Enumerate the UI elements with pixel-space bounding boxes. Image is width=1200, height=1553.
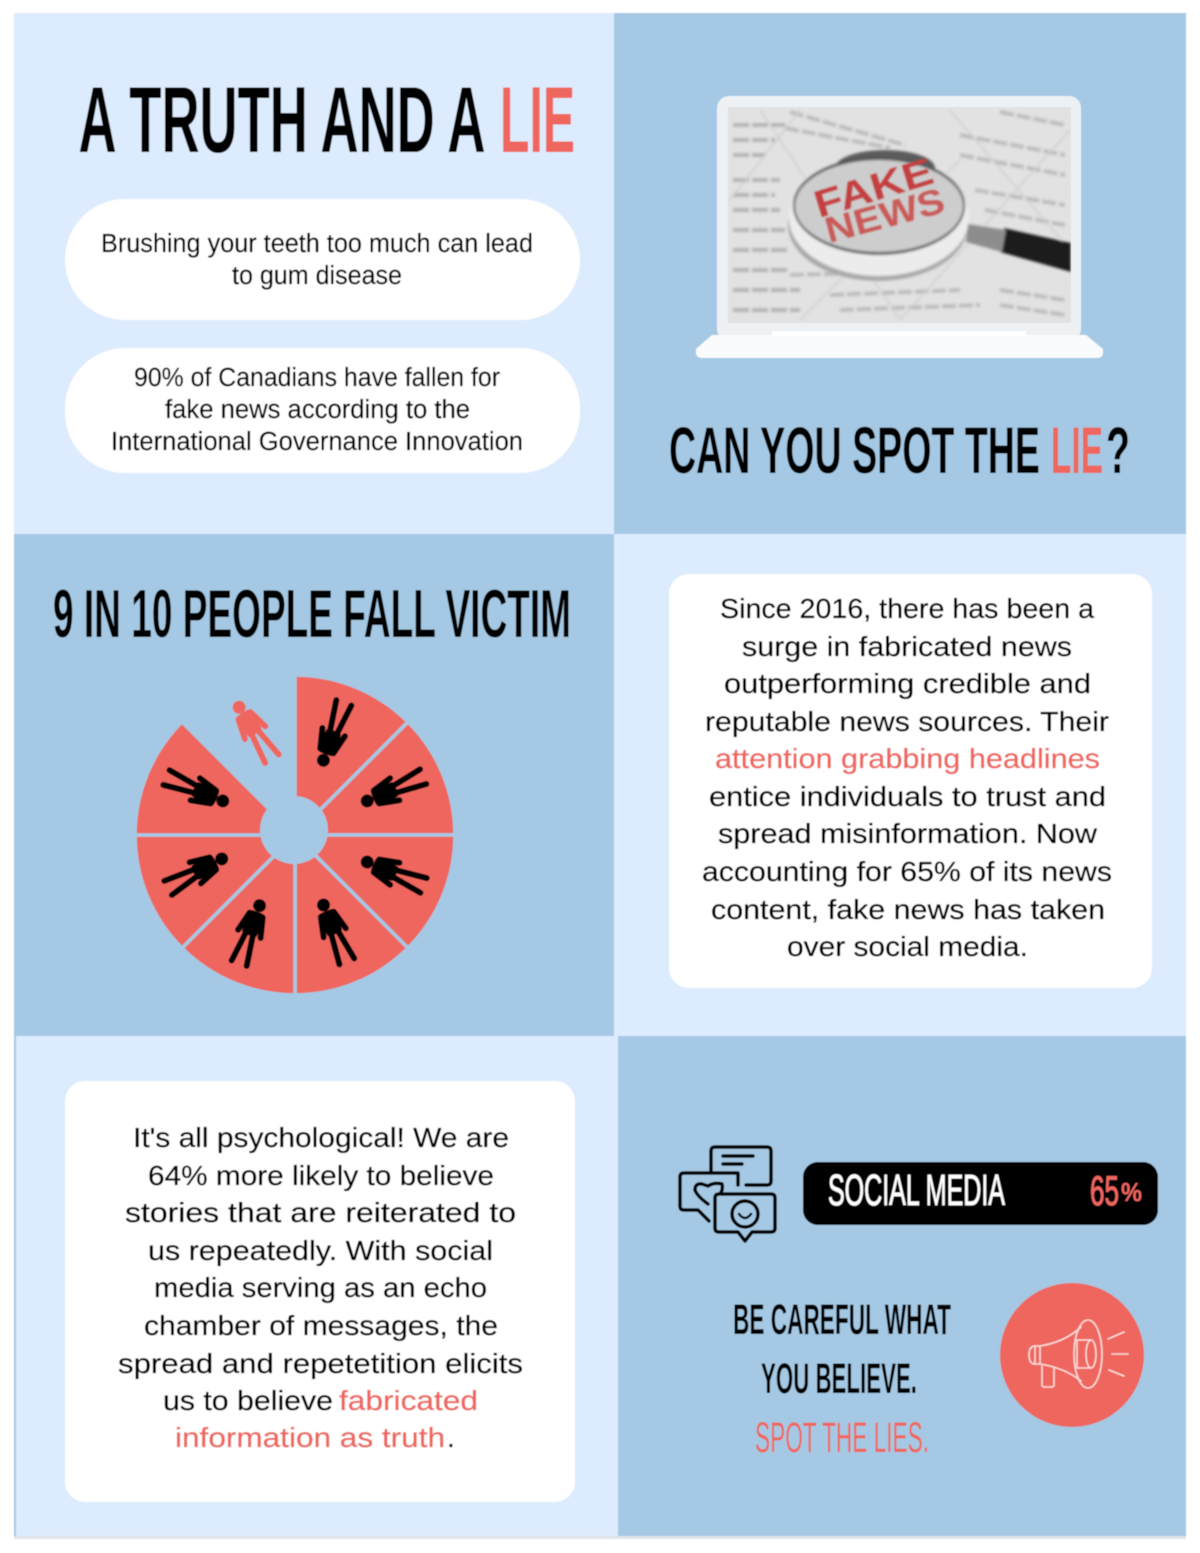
text card: fabricated news: over social media. <box>787 931 1028 962</box>
statement pill: 90% of Canadians: International Governance Innovation <box>111 428 523 456</box>
wheel chart: 9 of 10 <box>135 675 455 995</box>
text card: fabricated news: Since 2016, there has been a <box>720 593 1094 624</box>
laptop with fake news image: NEWS <box>820 180 949 251</box>
text card: fabricated news: reputable news sources. Their <box>705 706 1109 737</box>
panel: since 2016 <box>614 534 1186 1036</box>
panel: social media <box>618 1036 1186 1536</box>
icon: coral person <box>226 696 282 765</box>
text card: fabricated news: attention grabbing headlines <box>715 743 1100 774</box>
text card: psychology: us to believe <box>163 1385 333 1416</box>
laptop with fake news image: FAKE <box>809 151 938 227</box>
call to action text: YOU BELIEVE. <box>761 1355 917 1403</box>
text card: fabricated news: surge in fabricated news <box>742 631 1072 662</box>
text card: fabricated news: accounting for 65% of its news <box>702 856 1112 887</box>
call to action text: SPOT THE LIES. <box>755 1414 929 1462</box>
text card: psychology: . <box>447 1422 455 1453</box>
text card: psychology: chamber of messages, the <box>144 1310 498 1341</box>
title: LIE <box>500 67 575 172</box>
panel: a truth and a lie <box>14 13 614 534</box>
statement pill: 90% of Canadians: fake news according to the <box>165 396 470 424</box>
heading: 9 in 10 people fall victim: 9 IN 10 PEOPLE FALL VICTIM <box>53 576 571 652</box>
heading: can you spot the lie: ? <box>1106 413 1130 487</box>
panel: psychological <box>14 1036 618 1536</box>
text card: fabricated news: entice individuals to trust and <box>709 781 1106 812</box>
text card: psychology <box>65 1081 575 1502</box>
bottom shadow strip <box>14 1536 1186 1539</box>
text card: psychology: us repeatedly. With social <box>148 1235 493 1266</box>
text card: fabricated news <box>669 574 1152 988</box>
heading: can you spot the lie: LIE <box>1051 413 1103 487</box>
statement pill: brushing teeth <box>65 199 580 320</box>
statement pill: 90% of Canadians: 90% of Canadians have fallen for <box>134 364 500 392</box>
bar: social media 65%: 65 <box>1090 1167 1119 1214</box>
panel: can you spot the lie <box>614 13 1186 534</box>
icon: megaphone <box>1000 1283 1144 1427</box>
panel: 9 in 10 <box>14 534 614 1036</box>
bar: social media 65% <box>803 1162 1158 1225</box>
text card: psychology: spread and repetetition elicits <box>118 1348 523 1379</box>
laptop with fake news image <box>696 96 1103 358</box>
title <box>78 67 575 172</box>
statement pill: 90% of Canadians <box>65 348 580 473</box>
call to action text <box>733 1296 951 1462</box>
bar: social media 65%: SOCIAL MEDIA <box>828 1166 1005 1215</box>
text card: fabricated news: outperforming credible and <box>724 668 1091 699</box>
icon: chat bubbles <box>680 1147 775 1241</box>
text card: psychology: fabricated <box>339 1385 478 1416</box>
bar: social media 65%: % <box>1121 1177 1142 1207</box>
title: A TRUTH AND A <box>78 67 486 172</box>
statement pill: brushing teeth: to gum disease <box>232 262 402 290</box>
text card: psychology: It's all psychological! We are <box>133 1122 509 1153</box>
call to action text: BE CAREFUL WHAT <box>733 1296 951 1344</box>
text card: psychology: information as truth <box>175 1422 445 1453</box>
text card: psychology: stories that are reiterated to <box>125 1197 516 1228</box>
statement pill: brushing teeth: Brushing your teeth too much can lead <box>101 230 533 258</box>
text card: psychology: 64% more likely to believe <box>148 1160 494 1191</box>
text card: psychology: media serving as an echo <box>154 1272 487 1303</box>
text card: fabricated news: spread misinformation. Now <box>718 818 1098 849</box>
text card: fabricated news: content, fake news has taken <box>711 894 1105 925</box>
